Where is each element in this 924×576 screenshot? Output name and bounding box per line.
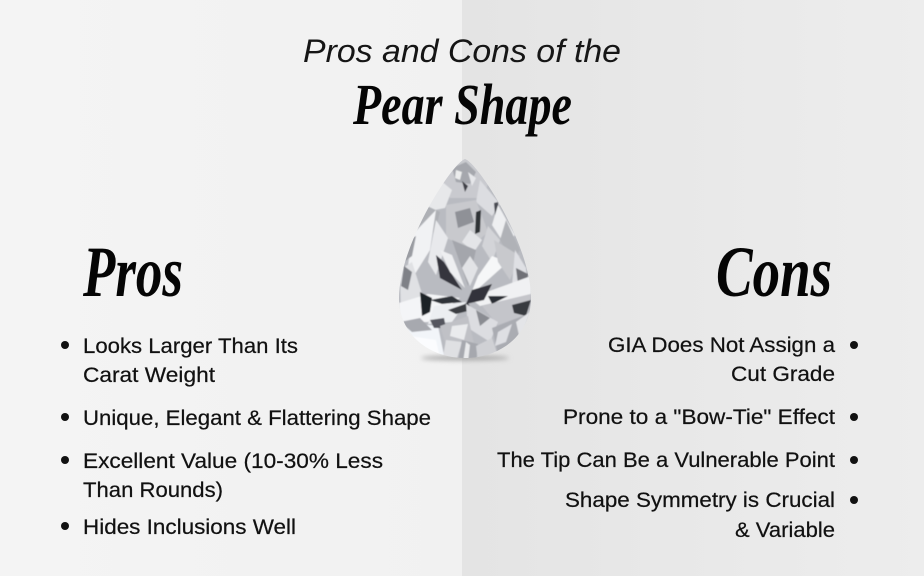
girdle band [399, 294, 460, 322]
cons item 2: Prone to a "Bow-Tie" Effect [563, 405, 835, 429]
left kite facets [408, 210, 436, 273]
list: cons [497, 333, 858, 542]
cons item 4: & Variable [735, 518, 835, 542]
pros item 1: Looks Larger Than Its [83, 334, 298, 358]
pros item 1 [61, 334, 298, 387]
title [303, 33, 621, 137]
panel: cons background [462, 0, 924, 576]
pros item 1: Carat Weight [83, 363, 215, 387]
pros item 3: Excellent Value (10-30% Less [83, 449, 383, 473]
lower facets [406, 324, 444, 355]
cons item 1 [608, 333, 858, 386]
title line two: Pear Shape [352, 72, 572, 137]
cons item 4 [565, 488, 858, 542]
upper facets [444, 159, 488, 198]
list: pros [61, 334, 431, 539]
heading: pros: Pros [82, 232, 183, 312]
cons item 3: The Tip Can Be a Vulnerable Point [497, 448, 835, 472]
pros item 3 [61, 449, 383, 502]
pros item 3: Than Rounds) [83, 478, 223, 502]
pros item 4: Hides Inclusions Well [83, 515, 296, 539]
icon: pear diamond [395, 155, 535, 362]
heading: cons: Cons [716, 232, 832, 312]
cons item 1: GIA Does Not Assign a [608, 333, 835, 357]
pros item 2: Unique, Elegant & Flattering Shape [83, 406, 431, 430]
cons item 4: Shape Symmetry is Crucial [565, 488, 835, 512]
cons item 1: Cut Grade [731, 362, 835, 386]
title line one: Pros and Cons of the [303, 33, 621, 69]
panel: pros background [0, 0, 462, 576]
central star [436, 255, 462, 290]
